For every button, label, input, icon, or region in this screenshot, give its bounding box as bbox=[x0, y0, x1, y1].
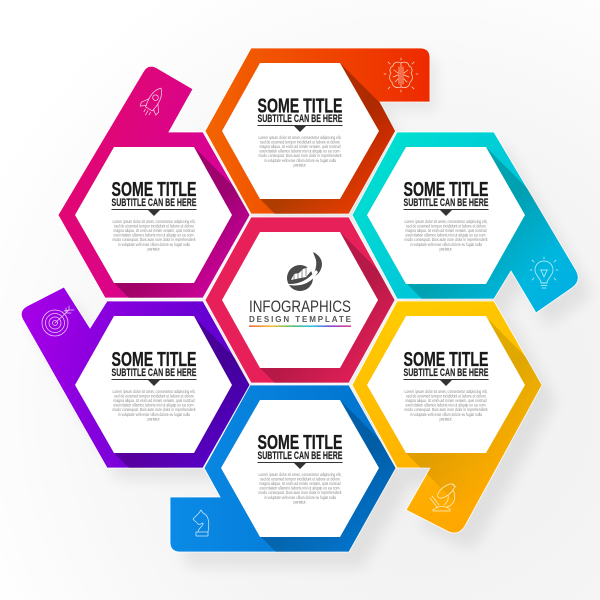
inner shadow bbox=[407, 147, 556, 299]
panel text bbox=[404, 348, 488, 421]
panel text: pariatur. bbox=[294, 162, 306, 167]
panel text: Lorem ipsum dolor sit amet, consectetur adipiscing elit, bbox=[258, 135, 342, 140]
panel shape bbox=[352, 301, 542, 533]
panel text: modo consequat. Duis aute irure dolor in reprehenderit bbox=[404, 407, 488, 412]
panel text: pariatur. bbox=[440, 246, 452, 251]
panel text: modo consequat. Duis aute irure dolor in reprehenderit bbox=[112, 237, 196, 242]
panel text: magna aliqua. Ut enim ad minim veniam, quis nostrud bbox=[114, 398, 195, 403]
panel text: modo consequat. Duis aute irure dolor in reprehenderit bbox=[404, 237, 488, 242]
icon: rocket bbox=[137, 83, 170, 120]
rainbow underline bbox=[249, 326, 351, 327]
icon: light bulb bbox=[530, 257, 558, 288]
panel: upper left magenta hexagon bbox=[58, 66, 250, 298]
center title: DESIGN TEMPLATE bbox=[249, 315, 352, 324]
icon: brain bbox=[384, 58, 418, 92]
panel text: SUBTITLE CAN BE HERE bbox=[112, 197, 196, 209]
inner shadow bbox=[261, 400, 396, 552]
panel text bbox=[258, 94, 342, 167]
panel text: SOME TITLE bbox=[258, 94, 342, 117]
panel shape bbox=[170, 385, 396, 552]
panel text: Lorem ipsum dolor sit amet, consectetur adipiscing elit, bbox=[112, 389, 196, 394]
panel text: SUBTITLE CAN BE HERE bbox=[258, 113, 342, 125]
panel text: Lorem ipsum dolor sit amet, consectetur adipiscing elit, bbox=[404, 389, 488, 394]
panel text: modo consequat. Duis aute irure dolor in reprehenderit bbox=[258, 153, 342, 158]
white hexagon bbox=[222, 63, 379, 199]
panel text bbox=[112, 348, 196, 421]
center title: INFOGRAPHICS bbox=[249, 298, 351, 316]
panel text: in voluptate velit esse cillum dolore eu fugiat nulla bbox=[410, 242, 483, 247]
panel text: in voluptate velit esse cillum dolore eu fugiat nulla bbox=[118, 242, 191, 247]
icon: microscope bbox=[430, 481, 457, 511]
panel shape bbox=[21, 287, 250, 468]
panel text: SOME TITLE bbox=[404, 178, 488, 201]
panel text: SOME TITLE bbox=[112, 178, 196, 201]
panel text: Lorem ipsum dolor sit amet, consectetur adipiscing elit, bbox=[112, 219, 196, 224]
panel text: exercitation ullamco laboris nisi ut aliquip ex ea com- bbox=[260, 486, 341, 491]
panel text: exercitation ullamco laboris nisi ut aliquip ex ea com- bbox=[114, 403, 195, 408]
inner shadow bbox=[114, 147, 250, 298]
panel text: exercitation ullamco laboris nisi ut aliquip ex ea com- bbox=[114, 233, 195, 238]
panel: top orange hexagon bbox=[206, 48, 430, 214]
panel text: magna aliqua. Ut enim ad minim veniam, quis nostrud bbox=[406, 398, 487, 403]
panel text: sed do eiusmod tempor incididunt ut labore et dolore bbox=[114, 394, 195, 399]
panel text: SOME TITLE bbox=[112, 348, 196, 371]
panel text: magna aliqua. Ut enim ad minim veniam, quis nostrud bbox=[114, 228, 195, 233]
panel text: modo consequat. Duis aute irure dolor in reprehenderit bbox=[258, 490, 342, 495]
panel text: SUBTITLE CAN BE HERE bbox=[258, 450, 342, 462]
inner shadow bbox=[260, 232, 395, 383]
center title bbox=[249, 298, 352, 324]
panel text: pariatur. bbox=[440, 416, 452, 421]
inner shadow bbox=[260, 63, 396, 214]
panel text: sed do eiusmod tempor incididunt ut labore et dolore bbox=[260, 140, 341, 145]
panel text: magna aliqua. Ut enim ad minim veniam, quis nostrud bbox=[260, 481, 341, 486]
panel shape bbox=[205, 217, 395, 383]
icon: target bbox=[42, 306, 74, 336]
panel text: pariatur. bbox=[148, 416, 160, 421]
panel text: sed do eiusmod tempor incididunt ut labore et dolore bbox=[260, 477, 341, 482]
panel text: magna aliqua. Ut enim ad minim veniam, quis nostrud bbox=[406, 228, 487, 233]
panel shape bbox=[205, 48, 430, 214]
panel text: magna aliqua. Ut enim ad minim veniam, quis nostrud bbox=[260, 144, 341, 149]
white hexagon bbox=[221, 400, 379, 537]
panel text: Lorem ipsum dolor sit amet, consectetur adipiscing elit, bbox=[258, 472, 342, 477]
icon: chess knight bbox=[193, 510, 209, 536]
panel text: sed do eiusmod tempor incididunt ut labore et dolore bbox=[406, 394, 487, 399]
panel text: in voluptate velit esse cillum dolore eu fugiat nulla bbox=[264, 158, 337, 163]
panel text: SUBTITLE CAN BE HERE bbox=[112, 367, 196, 379]
panel: bottom blue hexagon bbox=[170, 384, 396, 552]
panel: lower right yellow hexagon bbox=[352, 300, 542, 534]
panel text: exercitation ullamco laboris nisi ut aliquip ex ea com- bbox=[406, 403, 487, 408]
white hexagon bbox=[75, 316, 232, 453]
inner shadow bbox=[406, 318, 542, 500]
panel text: SOME TITLE bbox=[404, 348, 488, 371]
soft drop shadows under panels bbox=[31, 56, 590, 568]
panel text bbox=[258, 431, 342, 504]
white hexagon bbox=[367, 316, 525, 453]
panel text: in voluptate velit esse cillum dolore eu fugiat nulla bbox=[410, 412, 483, 417]
panel text: sed do eiusmod tempor incididunt ut labore et dolore bbox=[114, 224, 195, 229]
panel text: pariatur. bbox=[148, 246, 160, 251]
logo: globe with chart bbox=[283, 252, 322, 291]
panel text: Lorem ipsum dolor sit amet, consectetur adipiscing elit, bbox=[404, 219, 488, 224]
panel text: in voluptate velit esse cillum dolore eu fugiat nulla bbox=[264, 495, 337, 500]
panel text: exercitation ullamco laboris nisi ut aliquip ex ea com- bbox=[260, 149, 341, 154]
panel text: sed do eiusmod tempor incididunt ut labore et dolore bbox=[406, 224, 487, 229]
panel shape bbox=[58, 66, 250, 298]
inner shadow bbox=[114, 318, 250, 468]
panel text: SUBTITLE CAN BE HERE bbox=[404, 197, 488, 209]
panel text: SUBTITLE CAN BE HERE bbox=[404, 367, 488, 379]
panel text: exercitation ullamco laboris nisi ut aliquip ex ea com- bbox=[406, 233, 487, 238]
panel: lower left purple hexagon bbox=[22, 288, 250, 468]
panel: upper right teal hexagon bbox=[352, 132, 578, 314]
white hexagon bbox=[75, 147, 232, 283]
panel text: in voluptate velit esse cillum dolore eu fugiat nulla bbox=[118, 412, 191, 417]
panel text bbox=[112, 178, 196, 251]
white hexagon bbox=[367, 147, 525, 284]
panel text: SOME TITLE bbox=[258, 431, 342, 454]
panel: center crimson hexagon bbox=[205, 216, 396, 384]
panel text: pariatur. bbox=[294, 499, 306, 504]
white hexagon bbox=[222, 232, 378, 368]
panel text: modo consequat. Duis aute irure dolor in reprehenderit bbox=[112, 407, 196, 412]
panel shape bbox=[352, 132, 578, 313]
panel text bbox=[404, 178, 488, 251]
